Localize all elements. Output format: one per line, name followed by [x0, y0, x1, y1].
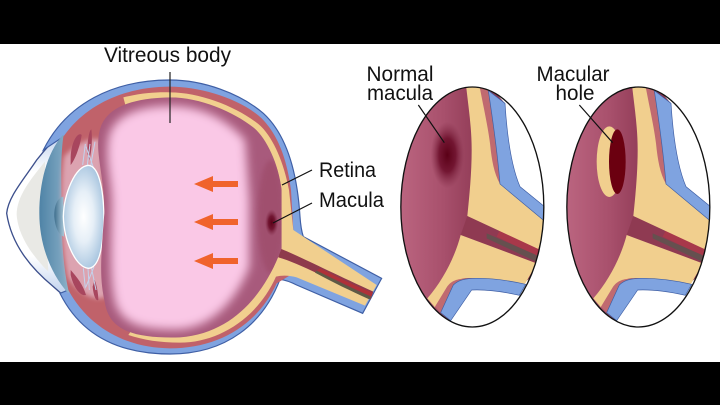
cornea [7, 130, 67, 298]
zonule fibres [83, 142, 96, 290]
macula spot [266, 210, 278, 234]
white background lower right [451, 279, 529, 326]
lower red layer [435, 279, 465, 314]
arrow: middle [194, 214, 238, 230]
ciliary muscle lower [71, 270, 98, 300]
lower blue layer [607, 278, 692, 321]
arrow: lower [194, 253, 238, 269]
label: hole: hole [556, 82, 594, 105]
pointer line [579, 105, 613, 143]
label: macula line: macula [367, 82, 433, 105]
panel: macular hole [566, 83, 713, 330]
oval outline [401, 87, 544, 327]
hole opening [609, 129, 626, 194]
label: vitreous body: Vitreous body [104, 44, 231, 67]
line: vitreous body pointer [169, 72, 171, 123]
upper red layer [646, 88, 666, 184]
optic nerve red stripe [317, 268, 373, 297]
nerve grey stripe [487, 233, 537, 261]
retina surface [566, 87, 711, 328]
label: macular: Macular [536, 63, 610, 86]
arrow: upper [194, 176, 238, 192]
dark macula spot [432, 126, 462, 184]
upper red layer [480, 88, 500, 184]
white background upper right [664, 96, 710, 206]
label: macula: Macula [319, 189, 384, 212]
macula zone [258, 160, 283, 273]
nerve grey stripe [653, 233, 703, 261]
lower yellow layer [593, 235, 703, 307]
nerve red stripe [497, 231, 539, 256]
lower red layer [601, 279, 631, 314]
ciliary muscle upper [71, 129, 92, 165]
label: normal macula: Normal [366, 63, 434, 86]
lens [63, 165, 104, 268]
line: macula pointer [273, 203, 312, 223]
bottom black bar [0, 362, 720, 405]
eye cross-section diagram [7, 80, 382, 354]
iris and front blue band [39, 135, 80, 293]
ciliary body [62, 139, 107, 298]
line: retina pointer [282, 170, 312, 185]
nerve core [627, 216, 701, 262]
lower yellow layer [427, 235, 537, 307]
white background lower right [617, 279, 695, 326]
upper blue layer [488, 91, 547, 221]
iris tip [54, 197, 64, 237]
nerve red stripe [663, 231, 705, 256]
vitreous body [93, 93, 287, 343]
pointer line [418, 105, 444, 143]
retina surface [400, 87, 545, 328]
hole rim [596, 126, 616, 197]
lower blue layer [441, 278, 526, 321]
top black bar [0, 0, 720, 44]
nerve core [461, 216, 535, 262]
label: retina: Retina [319, 159, 376, 182]
front chamber crescent [17, 162, 48, 272]
white background upper right [498, 96, 544, 206]
upper blue layer [654, 91, 713, 221]
optic nerve grey stripe [315, 271, 371, 299]
optic nerve core [278, 248, 373, 299]
choroid red layer [61, 87, 293, 348]
upper yellow layer [466, 85, 547, 249]
retina yellow layer and optic nerve [123, 92, 377, 343]
oval outline [567, 87, 710, 327]
sclera outer blue layer [43, 80, 382, 354]
upper yellow layer [632, 85, 713, 249]
panel: normal macula [400, 83, 547, 330]
